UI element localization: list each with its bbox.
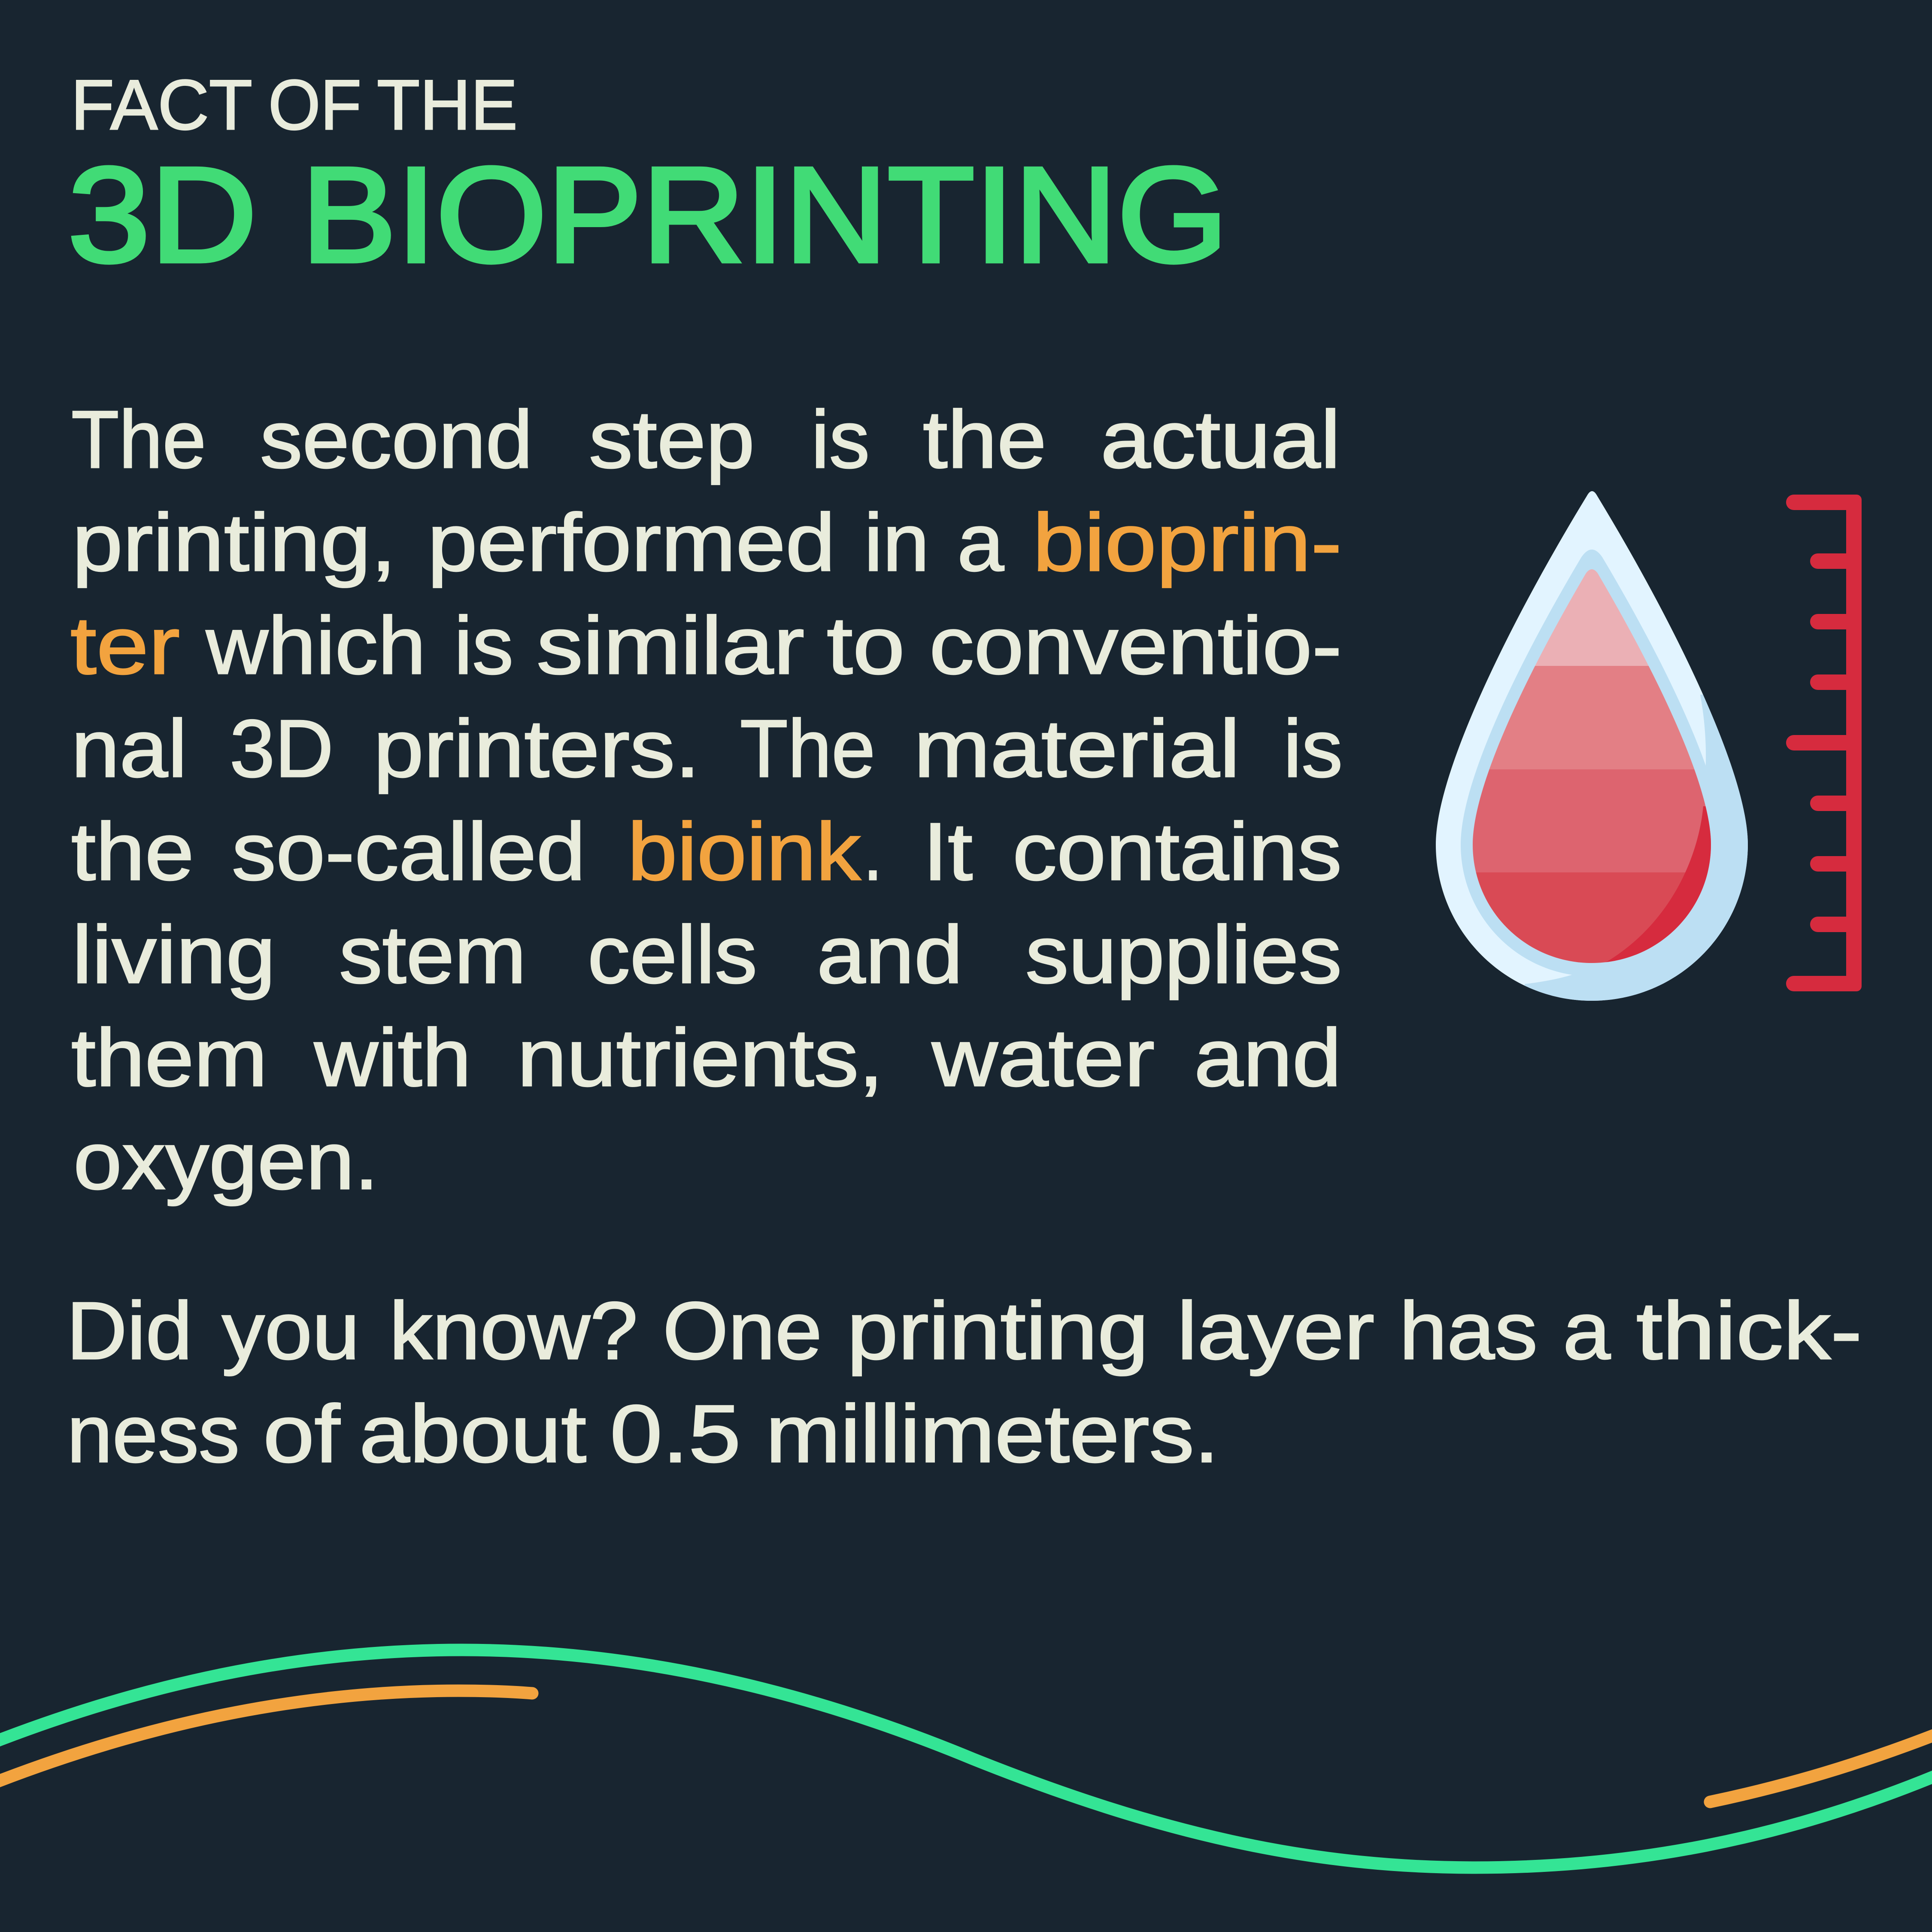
main paragraph: printing, [72,497,396,588]
main paragraph: oxygen. [73,1115,379,1206]
main paragraph: bioprin- [1033,497,1342,588]
icon: blood drop [1436,491,1748,1001]
orange wave line right [1710,1733,1932,1802]
main paragraph: second [260,394,533,485]
did you know paragraph: you [222,1285,360,1376]
main paragraph: The [740,703,875,794]
main paragraph: actual [1101,394,1341,485]
orange wave line left [0,1691,532,1784]
did you know paragraph: ness [67,1388,240,1479]
heading: fact of the: THE [377,65,518,144]
main paragraph: the [923,394,1046,485]
heading: 3D bioprinting: BIOPRINTING [301,139,1228,290]
main paragraph: with [314,1012,471,1103]
icon: ruler scale [1786,495,1862,991]
did you know paragraph: Did [67,1285,192,1376]
main paragraph: cells [588,909,757,1000]
did you know paragraph: has [1399,1285,1538,1376]
main paragraph: contains [1013,806,1342,897]
did you know paragraph: a [1563,1285,1611,1376]
did you know paragraph: layer [1177,1285,1374,1376]
did you know paragraph [67,1285,1862,1479]
heading: fact of the: FACT [71,65,252,144]
main paragraph: material [914,703,1240,794]
main paragraph: ter [70,600,180,691]
main paragraph: . [863,806,883,897]
main paragraph: the [71,806,194,897]
main paragraph: nal [71,703,187,794]
heading: fact of the: OF [268,65,361,144]
main paragraph: a [957,497,1004,588]
green wave line [0,1650,1932,1868]
main paragraph: and [1194,1012,1341,1103]
main paragraph: to [827,600,905,691]
heading: fact of the [71,65,518,144]
main paragraph: bioink [628,806,861,897]
main paragraph: nutrients, [517,1012,883,1103]
main paragraph: them [71,1012,267,1103]
main paragraph: printers. [373,703,700,794]
main paragraph: stem [339,909,526,1000]
did you know paragraph: about [359,1388,586,1479]
main paragraph: The [71,394,206,485]
did you know paragraph: thick- [1636,1285,1862,1376]
main paragraph: similar [537,600,804,691]
main paragraph: is [811,394,870,485]
did you know paragraph: millimeters. [766,1388,1219,1479]
main paragraph: supplies [1025,909,1342,1000]
main paragraph: so-called [232,806,585,897]
main paragraph: It [923,806,973,897]
main paragraph: in [864,497,929,588]
did you know paragraph: printing [847,1285,1149,1376]
main paragraph [70,394,1343,1206]
did you know paragraph: 0.5 [610,1388,741,1479]
main paragraph: water [931,1012,1155,1103]
did you know paragraph: of [263,1388,340,1479]
main paragraph: 3D [230,703,334,794]
did you know paragraph: One [663,1285,822,1376]
did you know paragraph: know? [389,1285,638,1376]
heading: 3D bioprinting: 3D [68,139,257,290]
main paragraph: is [454,600,513,691]
main paragraph: which [206,600,426,691]
main paragraph: step [589,394,755,485]
main paragraph: and [817,909,963,1000]
main paragraph: living [72,909,276,1000]
main paragraph: performed [428,497,835,588]
main paragraph: is [1283,703,1343,794]
main paragraph: conventio- [929,600,1342,691]
